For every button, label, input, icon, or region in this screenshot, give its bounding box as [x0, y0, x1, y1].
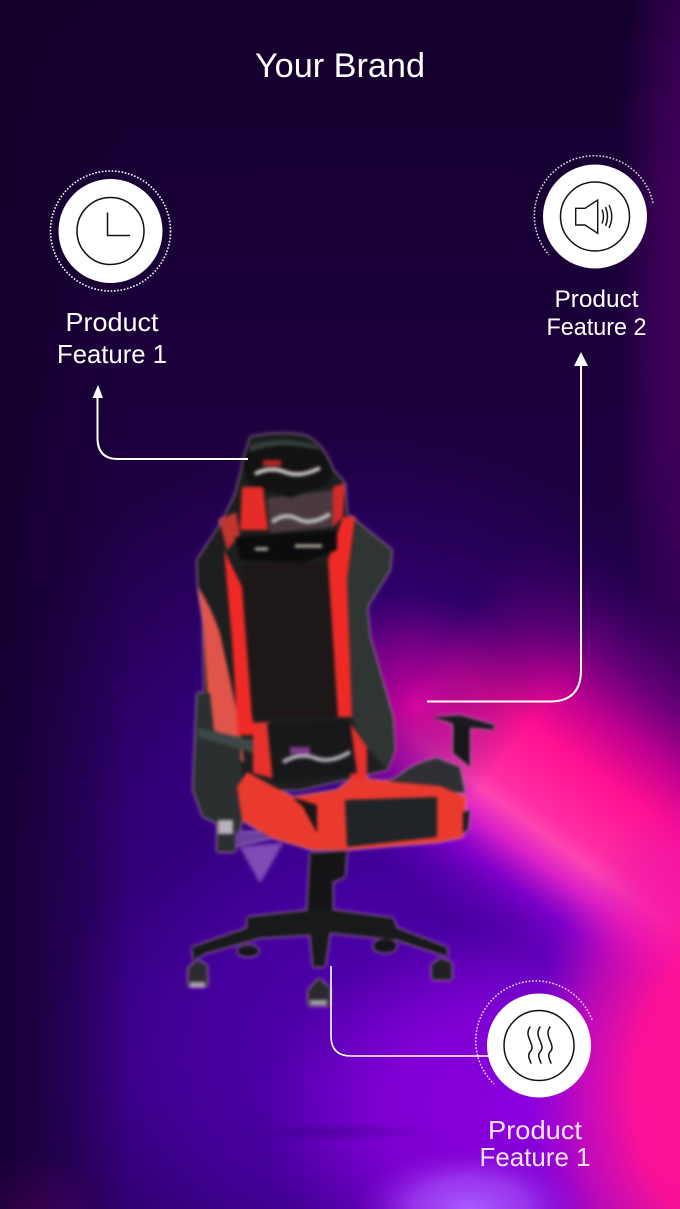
headrest logo	[255, 468, 320, 474]
connector arrow: chair arm to feature 2	[427, 352, 588, 702]
back right red stripe	[328, 517, 355, 717]
icon: clock	[108, 212, 130, 236]
left armrest column	[193, 693, 243, 852]
seat inset	[292, 797, 317, 833]
faint reflection under seat	[240, 843, 283, 883]
casters	[188, 960, 208, 986]
lumbar logo	[283, 752, 350, 762]
gas cylinder	[307, 851, 347, 910]
feature 2 badge	[534, 156, 653, 268]
headrest highlight	[250, 440, 320, 452]
left arm pad	[198, 728, 253, 753]
connector line: chair base to feature 3	[331, 966, 490, 1056]
base	[192, 910, 448, 967]
seat side bracket	[463, 810, 470, 833]
feature 3 label: Product	[488, 1115, 583, 1145]
rear seat bolster	[380, 758, 465, 793]
icon: heat waves	[528, 1027, 552, 1063]
right arm pad	[432, 715, 495, 730]
feature 1 label: Product	[66, 307, 159, 337]
inner casters	[373, 939, 397, 953]
feature 2 label	[546, 286, 646, 341]
seat center	[345, 797, 437, 847]
feature 3 label	[480, 1115, 590, 1172]
icon: speaker	[576, 200, 612, 233]
pillow logo	[272, 514, 330, 522]
feature 3 label: Feature 1	[480, 1142, 590, 1172]
feature 1 badge	[50, 171, 170, 291]
back left red stripe	[224, 550, 256, 735]
connector arrow: chair headrest to feature 1	[92, 385, 248, 459]
chair back	[197, 433, 395, 790]
headrest	[242, 438, 333, 498]
feature 2 label: Product	[554, 286, 639, 313]
lumbar red right	[348, 720, 367, 780]
gaming chair photo illustration	[188, 433, 495, 1006]
right armrest post	[453, 720, 470, 767]
back outer left red panel	[198, 587, 244, 762]
right wing	[347, 520, 394, 768]
lumbar red left	[253, 722, 276, 778]
back center panel	[242, 563, 337, 717]
seat red rim	[237, 772, 466, 850]
feature 1 label: Feature 1	[57, 339, 167, 369]
feature 3 badge	[476, 981, 592, 1098]
feature 2 label: Feature 2	[546, 314, 646, 341]
feature 1 label	[57, 307, 167, 369]
lumbar pillow	[267, 720, 357, 783]
top left red shoulder	[219, 512, 240, 550]
title: Your Brand	[255, 47, 425, 85]
neck pillow	[240, 487, 268, 530]
front bracket highlight	[218, 820, 233, 834]
